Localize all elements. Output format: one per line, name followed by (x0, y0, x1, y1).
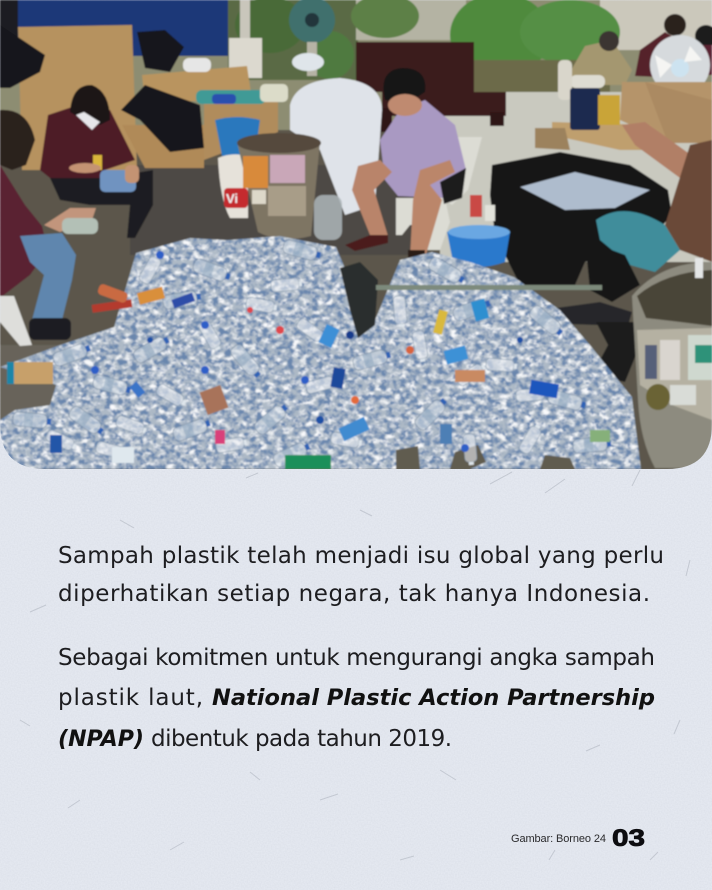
standing fan (289, 0, 335, 76)
paragraph 2: dibentuk pada tahun 2019. (151, 726, 452, 752)
body text (58, 543, 664, 752)
white paint bucket: Vi (226, 191, 238, 206)
coloured labels and caps (7, 251, 610, 469)
back row man in maroon (635, 14, 712, 78)
center trash bin with stickers (237, 133, 321, 239)
plastic sack (290, 78, 382, 215)
cans behind pile (470, 195, 495, 221)
paragraph 2: Sebagai komitmen untuk mengurangi angka sampah (58, 645, 655, 671)
photo background: floor and pavement (0, 0, 712, 470)
left girl in maroon with mask (40, 85, 153, 238)
image credit: Gambar: Borneo 24 (511, 833, 606, 845)
wooden bench (356, 42, 506, 132)
individual bottles (12, 239, 612, 469)
bottle pile (0, 236, 641, 469)
white plastic chair (396, 137, 482, 250)
central woman in purple blouse (345, 68, 466, 262)
right person in teal with patterned cloth (548, 140, 712, 387)
back row seated woman (558, 31, 632, 100)
wall and plants (228, 0, 712, 92)
blue bucket (215, 117, 260, 156)
blue tarp (0, 0, 228, 56)
table fan (648, 34, 712, 83)
grey rod across pile (376, 285, 602, 290)
paragraph 1: diperhatikan setiap negara, tak hanya Indonesia. (58, 581, 650, 607)
dark gaps in pile (340, 262, 378, 338)
right person's arm (622, 122, 688, 178)
black garbage bag with bottles (490, 152, 672, 285)
paragraph 2 (58, 645, 655, 752)
stacked cardboard boxes (0, 0, 278, 170)
floral bag and yellow box (570, 88, 620, 130)
photo: volunteers sorting plastic bottles (0, 0, 712, 470)
blue plastic basin (447, 225, 510, 267)
bottles on boxes (183, 58, 288, 104)
paragraph 1 (58, 543, 664, 607)
plastic bottle standing (314, 195, 342, 240)
paragraph 1: Sampah plastik telah menjadi isu global yang perlu (58, 543, 664, 569)
foreground girl in maroon and jeans (0, 110, 98, 346)
paragraph 2: plastik laut, (58, 685, 203, 711)
page number: 03 (612, 825, 645, 852)
black garbage bags (0, 25, 204, 152)
white paint bucket (218, 154, 248, 218)
paragraph 2: National Plastic Action Partnership (212, 686, 655, 711)
foreground trash bin with stickers (632, 258, 712, 468)
cardboard box back right (535, 82, 712, 150)
paragraph 2: (NPAP) (58, 727, 144, 752)
